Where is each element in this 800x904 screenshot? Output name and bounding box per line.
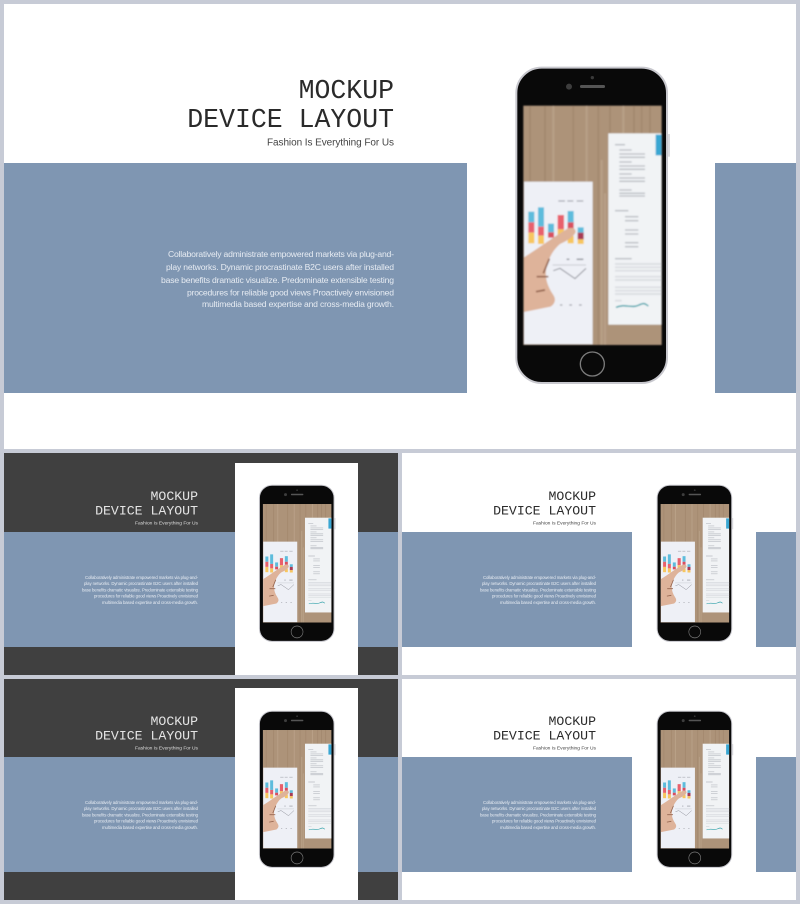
body text [480, 575, 597, 605]
body text: multimedia based expertise and cross-media growth. [500, 600, 596, 605]
phone mockup [657, 485, 733, 641]
body text: base benefits dramatic visualize. Predominate extensible testing [82, 588, 199, 592]
title: DEVICE LAYOUT [187, 105, 394, 135]
title [493, 714, 596, 744]
title: DEVICE LAYOUT [493, 504, 596, 518]
white column [235, 688, 358, 900]
body text: Collaboratively administrate empowered markets via plug-and- [85, 800, 199, 805]
subtitle: Fashion Is Everything For Us [533, 520, 597, 526]
body text: multimedia based expertise and cross-media growth. [500, 825, 596, 830]
body text: play networks. Dynamic procrastinate B2C users after installed [482, 806, 597, 811]
phone mockup [516, 68, 670, 383]
title: MOCKUP [549, 714, 596, 729]
body text: procedures for reliable good views Proactively envisioned [94, 594, 199, 598]
blue band right [715, 163, 796, 393]
phone mockup [259, 711, 336, 867]
title [95, 489, 198, 518]
body text: play networks. Dynamic procrastinate B2C users after installed [84, 581, 199, 586]
body text: base benefits dramatic visualize. Predominate extensible testing [480, 812, 597, 818]
blue band right [756, 757, 796, 872]
body text: procedures for reliable good views Proactively envisioned [492, 818, 597, 824]
title: MOCKUP [151, 714, 198, 729]
body text [82, 800, 199, 830]
body text: procedures for reliable good views Proactively envisioned [492, 594, 597, 598]
body text: base benefits dramatic visualize. Predominate extensible testing [480, 588, 597, 592]
slide 5: white layout [402, 679, 796, 900]
phone mockup [259, 485, 336, 641]
title: MOCKUP [299, 76, 394, 106]
title: DEVICE LAYOUT [95, 504, 198, 518]
title: MOCKUP [549, 489, 596, 504]
white column [235, 463, 358, 675]
body text: base benefits dramatic visualize. Predominate extensible testing [82, 812, 199, 818]
body text: play networks. Dynamic procrastinate B2C users after installed [84, 806, 199, 811]
body text: multimedia based expertise and cross-media growth. [102, 600, 198, 605]
title [187, 76, 394, 135]
blue band [4, 532, 398, 647]
title [493, 489, 596, 518]
slide 1: large white layout [4, 4, 796, 449]
subtitle: Fashion Is Everything For Us [135, 746, 199, 752]
title [95, 714, 198, 744]
body text: base benefits dramatic visualize. Predominate extensible testing [161, 275, 394, 285]
body text [82, 575, 199, 605]
blue band left [402, 532, 632, 647]
blue band left [402, 757, 632, 872]
body text: Collaboratively administrate empowered markets via plug-and- [483, 575, 597, 580]
title: DEVICE LAYOUT [95, 728, 198, 744]
slide 3: white layout [402, 453, 796, 675]
subtitle: Fashion Is Everything For Us [135, 520, 199, 526]
slide 2: dark layout [4, 453, 398, 675]
phone mockup [657, 711, 733, 867]
blue band [4, 757, 398, 872]
title: MOCKUP [151, 489, 198, 504]
subtitle: Fashion Is Everything For Us [267, 138, 394, 148]
body text [161, 249, 394, 309]
body text: Collaboratively administrate empowered markets via plug-and- [85, 575, 199, 580]
body text: procedures for reliable good views Proactively envisioned [94, 818, 199, 824]
body text: play networks. Dynamic procrastinate B2C users after installed [166, 262, 394, 272]
blue band left [4, 163, 467, 393]
title: DEVICE LAYOUT [493, 728, 596, 744]
body text: Collaboratively administrate empowered markets via plug-and- [483, 800, 597, 805]
body text: Collaboratively administrate empowered markets via plug-and- [168, 249, 394, 259]
body text: multimedia based expertise and cross-media growth. [202, 299, 394, 309]
body text: play networks. Dynamic procrastinate B2C users after installed [482, 581, 597, 586]
blue band right [756, 532, 796, 647]
body text: procedures for reliable good views Proactively envisioned [187, 288, 394, 298]
slide 4: dark layout [4, 679, 398, 900]
body text: multimedia based expertise and cross-media growth. [102, 825, 198, 830]
subtitle: Fashion Is Everything For Us [533, 746, 597, 752]
body text [480, 800, 597, 830]
